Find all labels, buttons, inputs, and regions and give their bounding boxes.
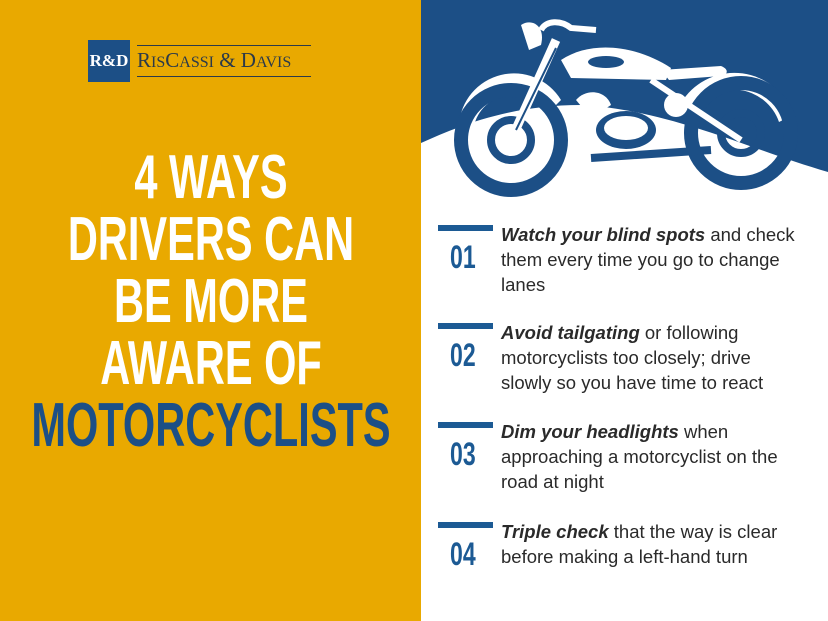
engine: [596, 111, 656, 149]
item 02: [438, 322, 763, 393]
title: 4 WAYS: [134, 143, 288, 212]
panel: left gold: [0, 0, 421, 621]
number 02: 02: [450, 337, 476, 373]
frame: [651, 80, 741, 140]
text 01: Watch your blind spots and check them every time you go to change lanes: [501, 224, 795, 295]
fenders: [459, 73, 561, 130]
title: AWARE OF: [100, 329, 322, 398]
number 01: 01: [450, 239, 476, 275]
wheels: [461, 90, 561, 190]
handlebar and headlamp: [541, 22, 596, 30]
logo box: [88, 40, 130, 82]
number 04: 04: [450, 536, 476, 572]
item 04: [438, 521, 777, 572]
title: DRIVERS CAN: [68, 205, 354, 274]
illustration: motorcycle: [421, 0, 828, 197]
tank: [561, 48, 671, 80]
logo box: R&D: [90, 51, 128, 70]
text 04: Triple check that the way is clear before making a left-hand turn: [501, 521, 777, 567]
fork: [511, 40, 556, 140]
text 02: Avoid tailgating or following motorcyclists too closely; drive slowly so you have time to react: [501, 322, 763, 393]
seat: [661, 66, 727, 80]
title: [31, 143, 391, 460]
number 03: 03: [450, 436, 476, 472]
logo: [88, 40, 311, 82]
title: MOTORCYCLISTS: [31, 391, 391, 460]
item 03: [438, 421, 778, 492]
text 03: Dim your headlights when approaching a motorcyclist on the road at night: [501, 421, 778, 492]
logo text: RISCASSI & DAVIS: [137, 48, 291, 72]
logo text: [137, 45, 311, 77]
title: BE MORE: [114, 267, 308, 336]
item 01: [438, 224, 795, 295]
